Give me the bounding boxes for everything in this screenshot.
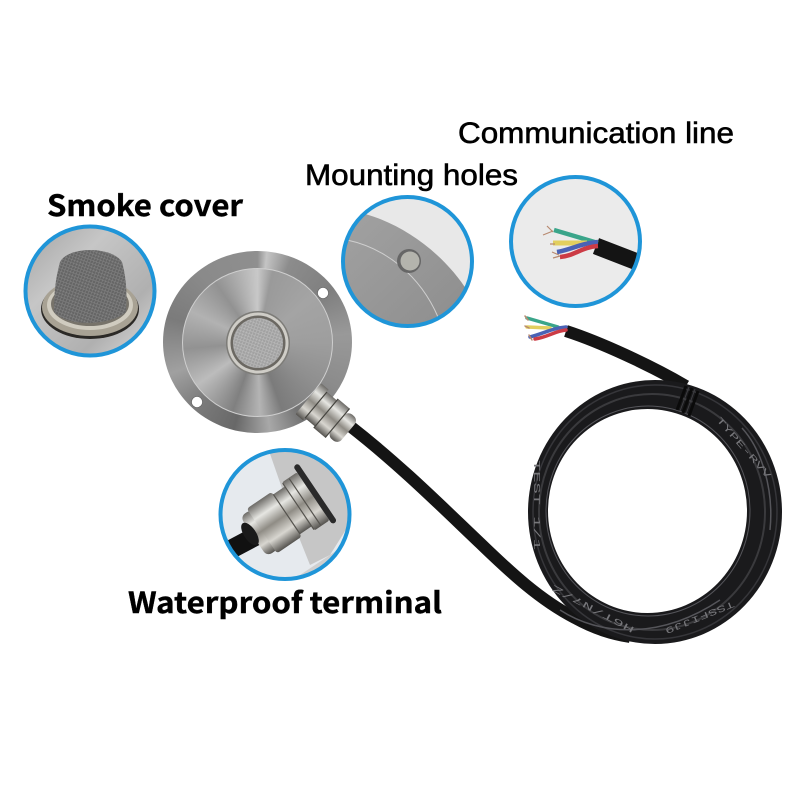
sensor flange disc	[163, 251, 352, 433]
coiled cable	[528, 380, 782, 644]
label: Smoke cover: Smoke cover	[47, 183, 243, 225]
cable printed marks: H6T/N7/Z	[549, 582, 636, 634]
cable printed marks	[531, 415, 773, 635]
sensor inner plate	[182, 268, 333, 417]
upper cable going to wires	[566, 331, 686, 386]
waterproof gland on sensor	[295, 383, 361, 447]
inset: mounting holes	[341, 195, 474, 328]
long cable from gland to coil	[350, 426, 630, 637]
exposed coloured wires	[525, 316, 566, 340]
inset: communication line	[510, 175, 645, 310]
main illustration	[24, 121, 782, 644]
label: Mounting holes: Mounting holes	[305, 159, 518, 192]
cable printed marks: TYPE-RVV	[714, 415, 773, 482]
label: Waterproof terminal: Waterproof terminal	[128, 580, 442, 622]
cable tie on coil	[677, 386, 698, 416]
cable printed marks: TEST 1/1	[531, 460, 541, 550]
inset: waterproof terminal	[218, 448, 353, 590]
cable printed marks: TSSFIJJ9	[663, 598, 736, 635]
inset: smoke cover	[20, 220, 160, 360]
sensor centre mesh and holes	[192, 288, 328, 408]
label: Communication line: Communication line	[458, 117, 734, 150]
